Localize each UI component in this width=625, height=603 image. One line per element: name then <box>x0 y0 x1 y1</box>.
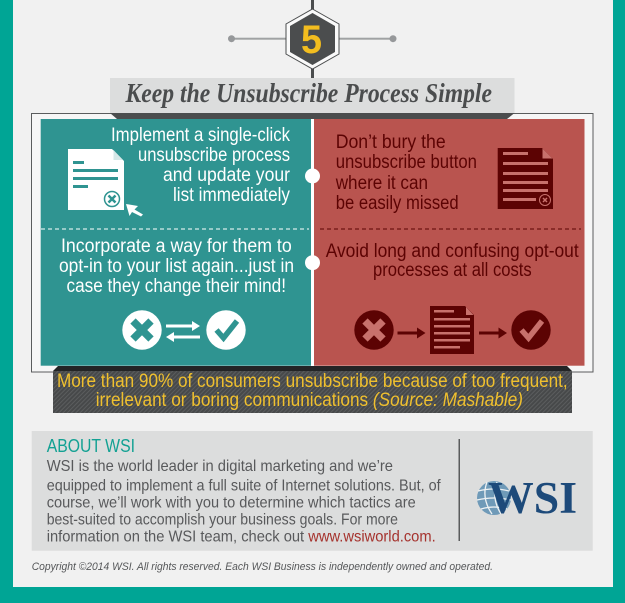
text: implement single-click <box>111 125 291 206</box>
text: don't bury: be easily missed <box>336 193 459 214</box>
vertical divider <box>458 439 460 541</box>
WSI logo: WSI <box>488 473 577 523</box>
center divider <box>311 119 314 366</box>
about body text: best-suited to accomplish your business goals. For more <box>47 512 398 528</box>
callout: statistic banner <box>53 366 572 413</box>
text: don't bury: unsubscribe button <box>336 152 477 173</box>
text: implement single-click: unsubscribe process <box>138 145 290 166</box>
callout: statistic banner: irrelevant or boring communications (Source: Mashable) <box>96 390 523 411</box>
dashed divider left <box>41 228 309 230</box>
text: incorporate opt-in: opt-in to your list again...just in <box>59 256 294 277</box>
panel: about WSI <box>32 431 593 551</box>
title banner: Keep the Unsubscribe Process Simple <box>125 78 492 108</box>
text: incorporate opt-in <box>59 236 294 297</box>
text: don't bury: where it can <box>335 173 428 194</box>
title banner <box>110 78 514 119</box>
icon: dense document <box>498 148 553 209</box>
about body text: WSI is the world leader in digital marketing and we’re <box>47 458 393 475</box>
timeline dot upper <box>305 168 320 184</box>
icon: cross and check swap <box>122 310 246 350</box>
about body text: information on the WSI team, check out www.wsiworld.com. <box>47 528 436 546</box>
text: avoid long opt-out: Avoid long and confusing opt-out <box>326 241 579 262</box>
text: avoid long opt-out <box>326 241 579 281</box>
timeline dot lower <box>305 255 320 270</box>
copyright line: Copyright ©2014 WSI. All rights reserved. Each WSI Business is independently owned and operated. <box>32 561 493 573</box>
text: implement single-click: and update your <box>163 165 291 186</box>
text: incorporate opt-in: Incorporate a way for them to <box>61 236 292 257</box>
text: implement single-click: list immediately <box>173 185 290 206</box>
text: don't bury: Don’t bury the <box>336 132 446 153</box>
dashed divider right <box>320 228 581 230</box>
panel: teal do column <box>41 119 311 366</box>
text: implement single-click: Implement a single-click <box>111 125 290 146</box>
text: incorporate opt-in: case they change their mind! <box>66 276 286 297</box>
text: avoid long opt-out: processes at all costs <box>373 260 532 281</box>
about body text: course, we’ll work with you to determine which tactics are <box>47 494 416 512</box>
panel: red don't column <box>314 119 584 366</box>
text: don't bury <box>335 132 477 214</box>
icon: document with unsubscribe cursor <box>68 149 143 216</box>
content frame <box>32 114 593 372</box>
step number badge <box>228 0 396 79</box>
icon: cross to document to check <box>354 306 551 354</box>
heading: about: ABOUT WSI <box>47 436 135 456</box>
about body text: equipped to implement a full suite of Internet solutions. But, of <box>47 478 441 494</box>
callout: statistic banner: More than 90% of consumers unsubscribe because of too frequent, <box>57 371 568 392</box>
about body text <box>47 458 441 546</box>
step number badge: 5 <box>301 18 322 62</box>
